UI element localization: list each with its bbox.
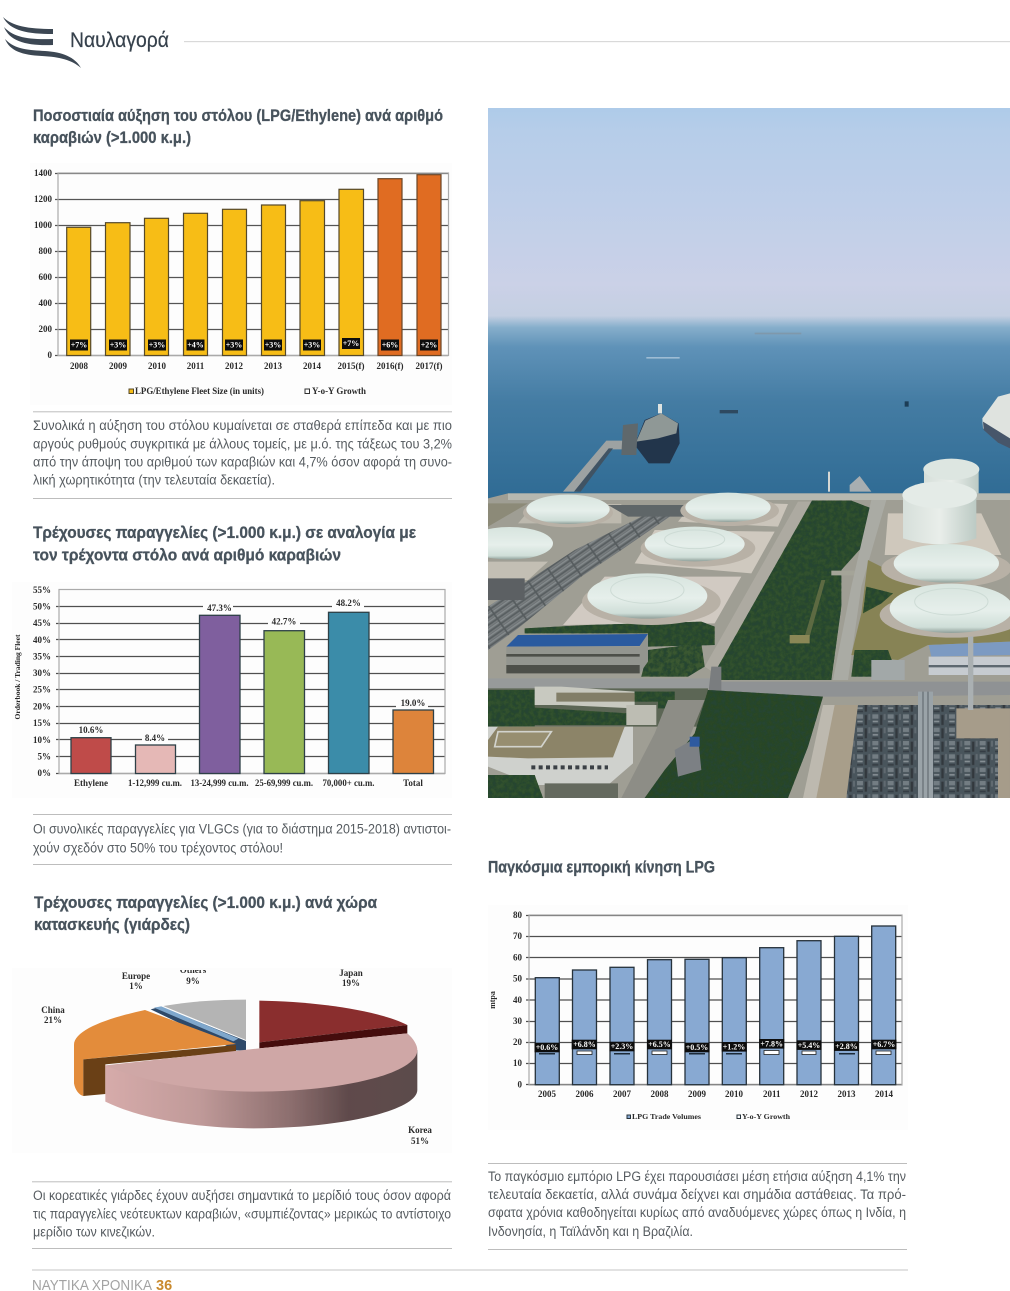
bar chart: fleet size: 2012 — [225, 361, 244, 371]
text block: fleet commentary — [33, 411, 452, 499]
bar chart: fleet size: 400 — [38, 298, 52, 308]
bar chart: LPG trade volumes: 60 — [513, 952, 522, 962]
bar chart: fleet size: +4% — [187, 340, 204, 350]
bar chart: LPG trade volumes: 0 — [518, 1080, 522, 1090]
slice: China — [74, 1010, 236, 1096]
diagonal road — [621, 700, 705, 798]
text block: Korean shipyards commentary — [32, 1181, 452, 1249]
photo: LNG terminal aerial view — [466, 108, 1010, 798]
growth labels: +2.3% — [611, 1042, 633, 1051]
bar chart: LPG trade volumes: mtpa — [488, 991, 497, 1009]
bar chart: fleet size: 0 — [48, 350, 52, 360]
text block: fleet commentary: Συνολικά η αύξηση του στόλου κυμαίνεται σε σταθερά επίπεδα και με πιο — [33, 418, 452, 433]
text block: fleet commentary: αργούς ρυθμούς συγκριτικά με άλλους τομείς, με μ.ό. της τάξεως του 3,2% — [33, 436, 452, 451]
bar chart: fleet size: 1000 — [34, 220, 52, 230]
bar chart: fleet size: 2013 — [264, 361, 282, 371]
right ship — [982, 393, 1010, 438]
bar chart: LPG trade volumes: 40 — [513, 995, 522, 1005]
pipe racks — [488, 510, 675, 650]
bar chart: orderbook to fleet: 19.0% — [401, 698, 425, 708]
bar chart: orderbook to fleet: 10% — [33, 735, 51, 745]
bar chart: orderbook to fleet: 15% — [33, 718, 51, 728]
bar chart: fleet size: +2% — [421, 340, 437, 350]
bar chart: orderbook to fleet: 10.6% — [79, 725, 103, 735]
bar chart: LPG trade volumes: 2006 — [576, 1089, 594, 1099]
bar chart: orderbook to fleet: 13-24,999 cu.m. — [190, 778, 248, 788]
bar chart: LPG trade volumes: 2007 — [613, 1089, 632, 1099]
growth labels: +0.6% — [536, 1043, 558, 1052]
chart legend: Y-o-Y Growth — [742, 1112, 791, 1121]
bar chart: orderbook to fleet: 47.3% — [207, 603, 232, 613]
chart legend: LPG/Ethylene Fleet Size (in units) — [135, 386, 264, 396]
pie labels: Europe — [122, 971, 150, 981]
horizon ships — [755, 333, 801, 334]
text block: Korean shipyards commentary: Οι κορεατικές γιάρδες έχουν αυξήσει σημαντικά το μερίδιό τους όσον αφορά — [33, 1188, 451, 1203]
bar chart: fleet size: 2014 — [303, 361, 322, 371]
slice: Others — [163, 1000, 246, 1040]
text block: Korean shipyards commentary: τις παραγγελίες νεότευκτων καραβιών, «συμπιέζοντας» μερικώς το αντίστοιχο — [33, 1207, 451, 1222]
bar chart: orderbook to fleet: 1-12,999 cu.m. — [128, 778, 182, 788]
ship — [635, 413, 680, 463]
waterfront — [508, 493, 1010, 500]
growth labels: +5.4% — [798, 1041, 820, 1050]
bar chart: fleet size: +3% — [304, 340, 320, 350]
heading: orderbook ratio: τον τρέχοντα στόλο ανά αριθμό καραβιών — [33, 546, 341, 564]
growth labels: +0.5% — [686, 1043, 708, 1052]
right building — [929, 642, 1010, 657]
bar chart: LPG trade volumes: 2014 — [875, 1089, 894, 1099]
bar chart: orderbook to fleet: 45% — [33, 618, 51, 628]
bar chart: LPG trade volumes: 2005 — [538, 1089, 556, 1099]
text block: LPG trade commentary — [488, 1163, 907, 1250]
bar chart: orderbook to fleet: 0% — [38, 768, 51, 778]
chart legend: LPG Trade Volumes — [632, 1112, 701, 1121]
heading: orders by shipyard country: κατασκευής (γιάρδες) — [34, 915, 190, 934]
bar chart: LPG trade volumes: 2010 — [725, 1089, 744, 1099]
bar chart: orderbook to fleet — [12, 582, 452, 798]
pie labels: China — [41, 1005, 65, 1015]
bar chart: orderbook to fleet: 55% — [33, 585, 51, 595]
bar chart: fleet size: 2016(f) — [376, 361, 404, 371]
footer — [32, 1270, 908, 1291]
pie labels: Japan — [339, 968, 363, 978]
icon: wave logo — [3, 17, 81, 68]
bar chart: fleet size: 2008 — [70, 361, 88, 371]
text block: LPG trade commentary: τελευταία δεκαετία, αλλά συνάμα δείχνει και σημάδια αστάθειας. Τα πρό- — [488, 1187, 906, 1202]
pie labels: Others — [180, 965, 207, 975]
section title: Ναυλαγορά — [70, 29, 169, 52]
sandy lot — [816, 705, 858, 798]
bar chart: fleet size: +3% — [226, 340, 242, 350]
text block: Korean shipyards commentary: μερίδιο των κινεζικών. — [33, 1225, 155, 1240]
chart legend — [129, 386, 366, 396]
bar chart: LPG trade volumes: 2011 — [763, 1089, 781, 1099]
east road — [833, 500, 886, 680]
heading: global LPG trade: Παγκόσμια εμπορική κίνηση LPG — [488, 858, 715, 876]
bar chart: orderbook to fleet: 30% — [33, 668, 51, 678]
bar chart: fleet size: 600 — [38, 272, 52, 282]
bars — [71, 612, 434, 774]
text block: fleet commentary: από την άποψη του αριθμού των καραβιών και 4,7% όσον αφορά τη συνο- — [33, 455, 452, 470]
bar chart: LPG trade volumes: 50 — [513, 974, 522, 984]
pie chart: shipyards — [42, 970, 432, 1144]
bars — [535, 926, 896, 1085]
text block: LPG trade commentary: Ινδονησία, η Ταϊλάνδη και η Βραζιλία. — [488, 1224, 693, 1239]
bar chart: LPG trade volumes: 10 — [513, 1058, 522, 1068]
bar chart: fleet size: 800 — [38, 246, 52, 256]
growth labels: +1.2% — [723, 1042, 745, 1052]
bar chart: LPG trade volumes — [488, 905, 908, 1130]
chart legend: Y-o-Y Growth — [312, 386, 366, 396]
bar chart: fleet size: +3% — [149, 340, 165, 350]
bar chart: LPG trade volumes: 70 — [513, 931, 522, 941]
plant office — [488, 727, 633, 785]
domes — [523, 495, 1010, 638]
growth labels: +7.8% — [760, 1040, 783, 1048]
heading: fleet growth: Ποσοστιαία αύξηση του στόλου (LPG/Ethylene) ανά αριθμό — [33, 106, 443, 125]
pie labels: 21% — [44, 1015, 62, 1025]
text block: LPG trade commentary: σφατα χρόνια καθοδηγείται κυρίως από αναδυόμενες χώρες όπως η Ινδία, η — [488, 1205, 906, 1220]
land — [488, 493, 1010, 798]
bar chart: fleet size: 2010 — [148, 361, 166, 371]
text block: VLGC commentary — [33, 814, 452, 865]
bar chart: fleet size: 2015(f) — [338, 361, 364, 371]
heading: orders by shipyard country: Τρέχουσες παραγγελίες (>1.000 κ.μ.) ανά χώρα — [34, 893, 377, 912]
pipe road — [488, 678, 711, 688]
slice: Korea — [105, 1033, 417, 1128]
slice: Europe — [151, 1006, 246, 1050]
paved pads — [518, 504, 621, 523]
pie labels: Korea — [408, 1125, 432, 1135]
bar chart: orderbook to fleet: 42.7% — [272, 616, 296, 626]
industrial plant — [846, 705, 1010, 798]
heading: fleet growth: καραβιών (>1.000 κ.μ.) — [33, 128, 191, 147]
bar chart: fleet size: 200 — [38, 324, 52, 334]
pie labels — [41, 965, 432, 1146]
tree strip — [525, 622, 715, 647]
bar chart: fleet size: 1200 — [34, 194, 52, 204]
bar chart: LPG trade volumes: 2013 — [838, 1089, 856, 1099]
growth labels — [534, 1039, 896, 1054]
jetty — [563, 441, 625, 492]
text block: VLGC commentary: χούν σχεδόν στο 50% του τρέχοντος στόλου! — [33, 840, 283, 855]
bar chart: fleet size — [30, 163, 452, 405]
bar chart: fleet size: 2017(f) — [416, 361, 442, 371]
growth labels: +6.5% — [648, 1040, 671, 1049]
south green — [645, 690, 823, 798]
central road — [705, 502, 811, 677]
text block: fleet commentary: λική χωρητικότητα (την τελευταία δεκαετία). — [33, 472, 275, 488]
pie labels: 9% — [186, 976, 200, 986]
green belt — [718, 501, 871, 680]
storage cylinders — [924, 469, 979, 493]
growth labels: +2.8% — [835, 1042, 858, 1051]
bar chart: orderbook to fleet: 20% — [33, 702, 51, 712]
bar chart: LPG trade volumes: 2009 — [688, 1089, 706, 1099]
growth labels: +6.7% — [873, 1040, 895, 1049]
pie labels: 1% — [129, 981, 143, 991]
bar chart: fleet size: 2009 — [109, 361, 128, 371]
pie labels: 19% — [342, 978, 360, 988]
grass — [851, 560, 1010, 660]
bar chart: fleet size: +6% — [382, 340, 398, 350]
bar chart: orderbook to fleet: 25% — [33, 684, 51, 694]
bar chart: orderbook to fleet: Ethylene — [74, 778, 108, 788]
text block: LPG trade commentary: Το παγκόσμιο εμπόριο LPG έχει παρουσιάσει μέση ετήσια αύξηση 4,1% την — [488, 1169, 906, 1184]
lower left — [488, 688, 708, 727]
bar chart: orderbook to fleet: 5% — [38, 752, 51, 762]
bar chart: fleet size: 2011 — [187, 361, 205, 371]
chart legend — [627, 1112, 791, 1121]
header — [3, 17, 1010, 68]
bar chart: LPG trade volumes: 2012 — [800, 1089, 818, 1099]
bar chart: orderbook to fleet: 70,000+ cu.m. — [322, 778, 374, 788]
growth labels: +6.8% — [573, 1040, 596, 1049]
bar chart: LPG trade volumes: 2008 — [650, 1089, 669, 1099]
bar chart: fleet size: +3% — [110, 340, 126, 350]
bar chart: LPG trade volumes: 20 — [513, 1037, 522, 1047]
blue roof building — [506, 634, 648, 647]
bar chart: orderbook to fleet: 35% — [33, 652, 51, 662]
bar chart: fleet size: +3% — [265, 340, 281, 350]
pie labels: 51% — [411, 1136, 429, 1146]
bar chart: orderbook to fleet: 48.2% — [336, 598, 361, 608]
bar chart: orderbook to fleet: 40% — [33, 635, 51, 645]
text block: VLGC commentary: Οι συνολικές παραγγελίες για VLGCs (για το διάστημα 2015-2018) αντιστοι- — [33, 821, 451, 836]
bar chart: orderbook to fleet: 50% — [33, 602, 51, 612]
bar chart: orderbook to fleet: Orderbook / Trading Fleet — [13, 634, 22, 719]
bar chart: fleet size: +7% — [343, 339, 359, 348]
bar chart: fleet size: 1400 — [34, 168, 52, 178]
bar chart: orderbook to fleet: 8.4% — [145, 733, 165, 743]
heading: orderbook ratio: Τρέχουσες παραγγελίες (>1.000 κ.μ.) σε αναλογία με — [33, 523, 416, 542]
slice: Japan — [259, 1001, 407, 1048]
bar chart: LPG trade volumes: 30 — [513, 1016, 522, 1026]
bar chart: LPG trade volumes: 80 — [513, 910, 522, 920]
bar chart: fleet size: +7% — [71, 340, 87, 350]
bar chart: orderbook to fleet: Total — [403, 778, 423, 788]
bar chart: orderbook to fleet: 25-69,999 cu.m. — [255, 778, 313, 788]
